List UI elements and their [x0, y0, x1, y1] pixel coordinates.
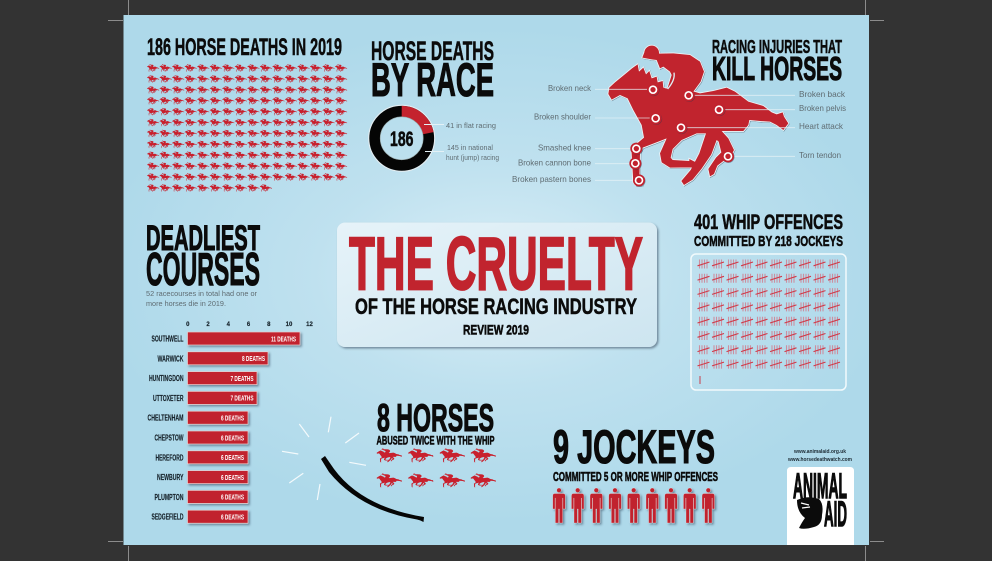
death counts: 11 DEATHS	[271, 336, 296, 343]
heading: horse deaths by race: BY RACE	[371, 53, 494, 106]
icon: animal	[797, 497, 823, 529]
review year: REVIEW 2019	[463, 322, 529, 338]
death counts: 6 DEATHS	[221, 416, 244, 422]
donut chart: 186	[390, 128, 414, 151]
heading: 8 horses: ABUSED TWICE WITH THE WHIP	[376, 434, 494, 448]
heading: whip offences	[694, 211, 843, 250]
crop marks	[108, 0, 884, 561]
heading: whip offences: 401 WHIP OFFENCES	[694, 211, 843, 234]
axis labels	[186, 322, 313, 328]
injury labels left: Broken cannon bone	[518, 158, 591, 168]
axis labels: 6	[247, 322, 251, 328]
injury labels right: Broken pelvis	[799, 103, 846, 113]
course names: HUNTINGDON	[149, 374, 184, 383]
title card	[337, 222, 657, 347]
heading: deadliest courses	[146, 219, 260, 295]
injury labels left: Broken neck	[548, 83, 592, 93]
pictogram: 186 horses	[147, 64, 347, 192]
injury labels right	[799, 89, 846, 160]
donut chart	[369, 105, 435, 171]
heading: racing injuries: KILL HORSES	[712, 51, 842, 88]
courses note: more horses die in 2019.	[146, 299, 226, 308]
donut labels	[424, 121, 499, 162]
heading: 9 jockeys: 9 JOCKEYS	[553, 420, 715, 473]
course names: PLUMPTON	[154, 493, 184, 502]
main panel	[124, 15, 869, 545]
injury labels right: Torn tendon	[799, 150, 841, 160]
injury labels right: Broken back	[799, 89, 846, 99]
heading: 9 jockeys	[553, 420, 718, 484]
axis labels: 4	[227, 322, 231, 328]
course names: CHELTENHAM	[148, 414, 184, 423]
heading: horse deaths by race: HORSE DEATHS	[371, 36, 494, 66]
donut labels: 41 in flat racing	[446, 121, 496, 130]
logo: Animal Aid	[787, 467, 854, 545]
death counts: 6 DEATHS	[221, 475, 244, 482]
injury labels left: Broken shoulder	[534, 112, 591, 122]
course names: SEDGEFIELD	[152, 513, 184, 522]
tally box	[691, 254, 846, 390]
text: AID	[824, 495, 847, 534]
death counts: 6 DEATHS	[221, 514, 244, 522]
heading: horse deaths by race	[371, 36, 494, 106]
injury labels right: Heart attack	[799, 121, 844, 131]
text: ANIMAL	[793, 467, 847, 506]
injury labels left	[512, 83, 592, 184]
course names: HEREFORD	[156, 453, 184, 462]
main title: THE CRUELTY	[349, 222, 643, 306]
courses note	[146, 289, 257, 308]
death counts: 7 DEATHS	[230, 376, 254, 383]
heading: whip offences: COMMITTED BY 218 JOCKEYS	[694, 233, 843, 250]
death counts	[221, 336, 296, 522]
axis labels: 8	[267, 322, 271, 328]
subtitle: OF THE HORSE RACING INDUSTRY	[355, 294, 637, 319]
course names: NEWBURY	[157, 473, 184, 482]
injury labels left: Broken pastern bones	[512, 174, 591, 184]
donut labels: 145 in national	[447, 143, 493, 152]
injury labels left: Smashed knee	[538, 142, 591, 152]
axis labels: 12	[306, 322, 313, 328]
courses note: 52 racecourses in total had one or	[146, 289, 257, 298]
website links: www.horsedeathwatch.com	[787, 457, 852, 463]
heading: deadliest courses: COURSES	[146, 243, 260, 295]
axis labels: 0	[186, 322, 190, 328]
course names	[148, 334, 184, 522]
website links: www.animalaid.org.uk	[793, 449, 847, 455]
website links	[787, 449, 852, 463]
heading: 186 horse deaths: 186 HORSE DEATHS IN 2019	[147, 34, 342, 61]
bar chart: deadliest courses	[148, 322, 313, 523]
death counts: 8 DEATHS	[242, 356, 265, 363]
icon: whip with motion rays	[282, 417, 424, 522]
axis labels: 10	[286, 322, 293, 328]
course names: SOUTHWELL	[152, 334, 184, 344]
heading: 8 horses: 8 HORSES	[377, 397, 494, 440]
death counts: 6 DEATHS	[221, 435, 244, 442]
donut labels: hunt (jump) racing	[446, 153, 499, 162]
course names: UTTOXETER	[153, 394, 184, 403]
pictogram: 8 horses	[377, 448, 496, 487]
bars	[188, 332, 300, 523]
heading: racing injuries: RACING INJURIES THAT	[712, 36, 842, 57]
heading: 8 horses	[376, 397, 494, 448]
death counts: 6 DEATHS	[221, 495, 244, 502]
heading: racing injuries	[712, 36, 842, 88]
axis labels: 2	[206, 322, 210, 328]
pictogram: 9 jockeys	[553, 488, 715, 523]
heading: 9 jockeys: COMMITTED 5 OR MORE WHIP OFFENCES	[553, 469, 718, 484]
heading: deadliest courses: DEADLIEST	[146, 219, 260, 258]
course names: WARWICK	[158, 354, 184, 363]
death counts: 7 DEATHS	[230, 396, 254, 403]
horse and jockey diagram	[595, 46, 795, 186]
course names: CHEPSTOW	[154, 434, 184, 442]
death counts: 6 DEATHS	[221, 455, 244, 462]
